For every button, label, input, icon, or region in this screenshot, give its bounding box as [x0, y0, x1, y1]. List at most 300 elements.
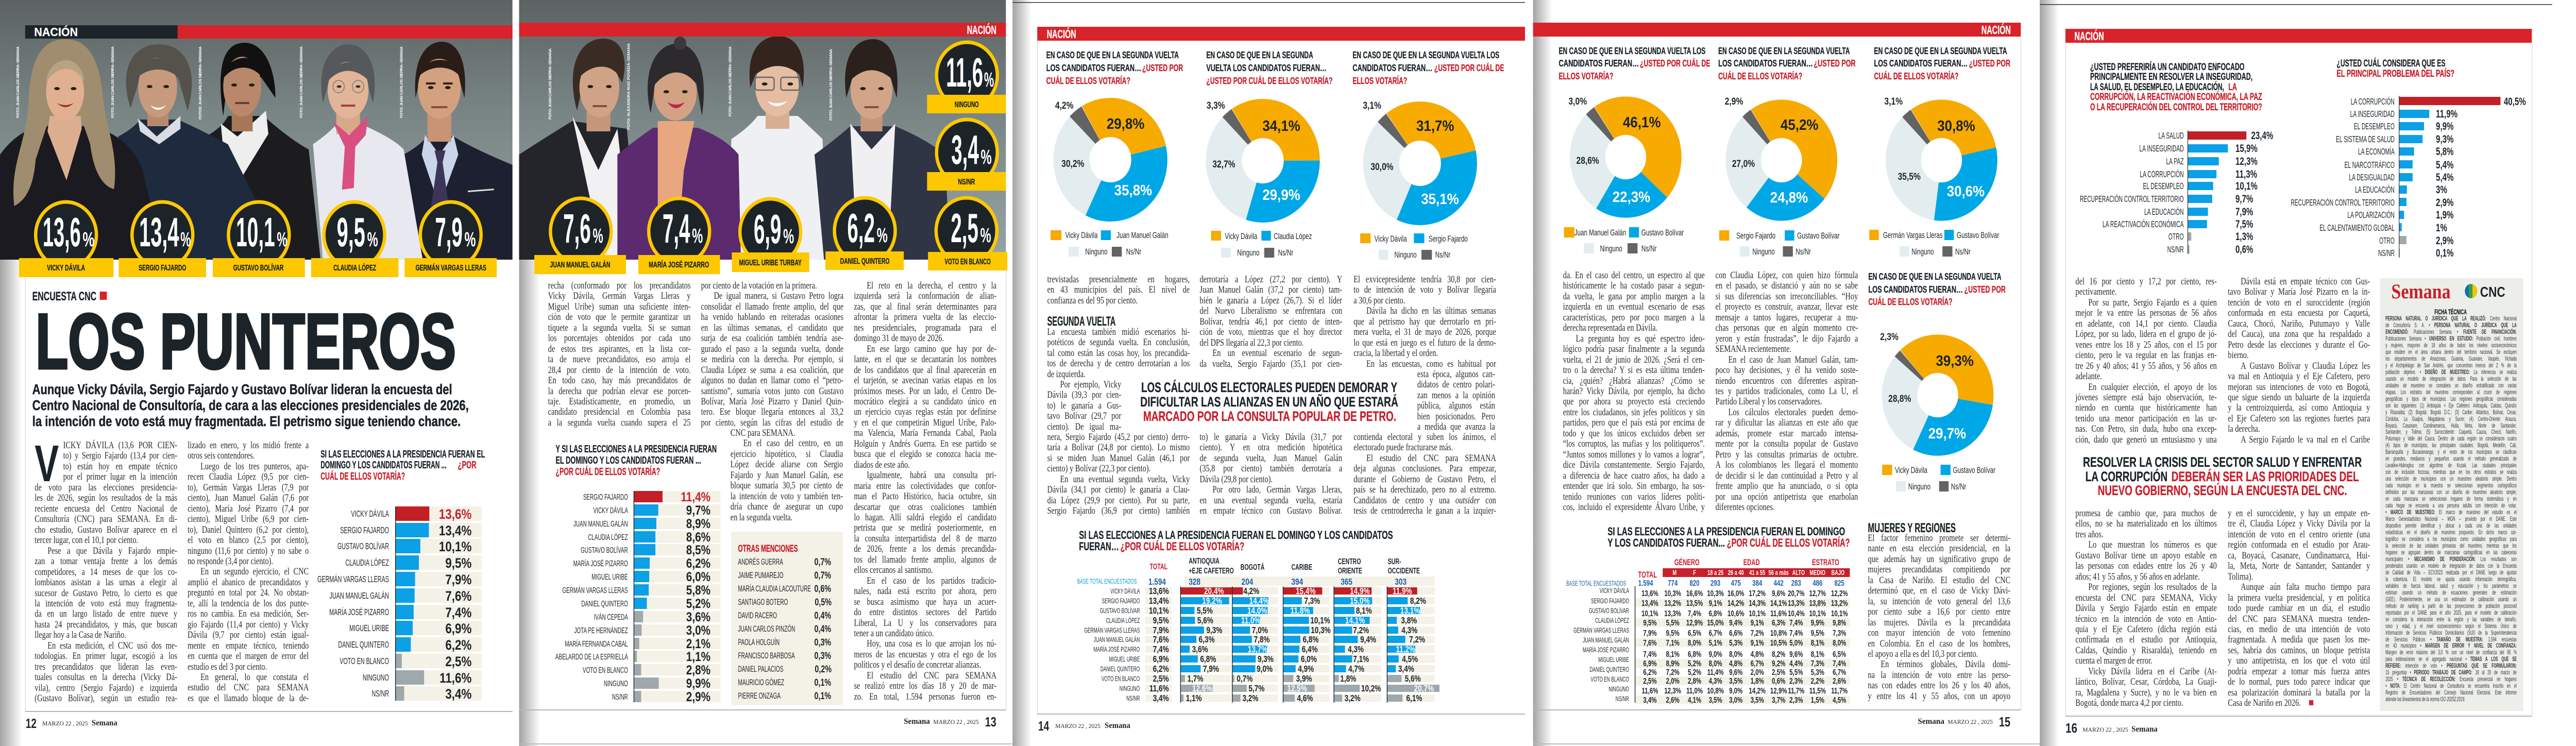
body text: page 12 column 1 top, beside drop cap: ICKY DÁVILA (13,6 POR CIEN-: [63, 440, 177, 451]
table column headers: +EJE CAFETERO: [1189, 566, 1234, 575]
table chart: by gender, age and stratum: 15,0%: [1707, 619, 1724, 628]
body text: page 15 column 2: mensaje a tantos lugares, recuperar a mu-: [1716, 312, 1858, 323]
table chart: by region: CLAUDIA LÓPEZ: [1106, 616, 1140, 625]
chart title: ¿USTED PREFERIRÍA UN CANDIDATO ENFOCADO: [2090, 61, 2245, 73]
table chart: by gender, age and stratum: 3,7%: [1772, 696, 1786, 705]
body text: page 12 column 1: cho estudio, Gustavo Bolívar aparece en el Pese a que Dávila y Fajardo empie-: [35, 524, 177, 556]
body text: page 14 column 3 upper: to de intención de voto y Bolívar llegaría Dávila ha dicho en las últimas semanas: [1353, 284, 1496, 316]
body text: page 13 column 1: la derecha que podrían elevar ese porcen-: [548, 386, 690, 397]
body text: page 16 column 2 lower: del CNC para SEMANA muestra tenden-: [2228, 614, 2370, 624]
table chart: by region: 14,4%: [1249, 596, 1269, 606]
section bar page 16: [2065, 29, 2532, 43]
donut panel: Galán vs Bolívar: CANDIDATOS FUERAN…: [1558, 58, 1639, 69]
body text: page 14 column 2 lower: [1199, 432, 1343, 516]
ficha técnica text: estadísticas en el diseño de muestreo propuesto. En dicho marco car-: [2385, 529, 2517, 536]
footer page 14: [1038, 718, 1130, 734]
body text: page 15 mujeres y regiones: y entre los 41 y 55 años, con un apoyo: [1868, 691, 2010, 702]
footer page 13: MARZO 22 , 2025: [933, 718, 979, 725]
badge: Juan Manuel Galán 7,6: %: [592, 225, 603, 247]
chart: preferred candidate focus: LA EDUCACIÓN: [2144, 207, 2184, 217]
body text: page 16 column 1 upper: tenido una menor participación en las ur-: [2075, 413, 2217, 424]
body text: page 13 column 2 top: se mediría con la derecha. Por ejemplo, si: [701, 354, 843, 365]
chart: preferred candidate focus: EL DESEMPLEO: [2143, 181, 2184, 192]
badge: Juan Manuel Galán 7,6: [534, 198, 626, 274]
body text: page 13 column 3: tos del llamado frente amplio, algunos de En el caso de los partidos tradicio-: [854, 554, 996, 586]
table title: ¿POR CUÁL DE ELLOS VOTARÍA?: [1121, 540, 1244, 553]
table chart: by gender, age and stratum: 4,5%: [1833, 696, 1846, 705]
pull quote page 16: DEBERÁN SER LAS PRIORIDADES DEL: [2172, 468, 2359, 484]
table chart: by gender, age and stratum: 11,6%: [1770, 609, 1787, 618]
ficha técnica text: • MARCO DE MUESTREO: El marco de muestreo del estudio es el: [2385, 508, 2517, 516]
body text: page 16 column 2 upper: Petro desde las elecciones y durante el Go- A Gustavo Bolívar y Claudia López les: [2228, 340, 2370, 371]
table chart: by gender, age and stratum: 7,4%: [1643, 650, 1657, 659]
body text: page 14 column 1 narrow beside pull quote: tavo Bolívar (29,7 por: [1047, 411, 1121, 421]
body text: page 13 column 2 top: ha venido hablando en reiteradas ocasiones: [701, 312, 843, 323]
chart: first round nine candidates: 9,5%: [445, 556, 472, 571]
table chart: by gender, age and stratum: 11,7%: [1831, 687, 1848, 696]
body text: page 14 column 3 upper: a 30,6 por ciento.: [1353, 295, 1405, 306]
donut panel: Dávila vs Galán: Juan Manuel Galán: [1116, 230, 1168, 241]
chart: first round nine candidates: 7,9%: [445, 572, 472, 587]
ficha técnica text: cada municipio en la muestra se seleccionan segmentos cartográficos: [2385, 482, 2517, 489]
body text: page 13 column 3: Holguín y Andrés Guerra. En ese partido se: [854, 438, 996, 449]
chart: first round extended list: VICKY DÁVILA: [594, 506, 629, 515]
body text: page 15 mujeres y regiones: nante en esta elección presidencial, en la: [1868, 543, 2010, 554]
body text: page 16 column 2 lower: fragmentada. A medida que pasen los me-: [2228, 634, 2370, 645]
body text: page 14 section segunda vuelta: tos de derecha y de centro derrotarían a los: [1047, 358, 1190, 369]
table headers: ESTRATO: [1812, 558, 1839, 568]
body text: page 15 mujeres y regiones: la Casa de Nariño. El estudio del CNC: [1868, 575, 2010, 586]
table chart: by gender, age and stratum: 14,1%: [1770, 599, 1787, 608]
donut panel: Galán vs Bolívar: 3,0%: [1569, 95, 1587, 107]
chart: main problem of the country: 1,9%: [2436, 209, 2454, 221]
body text: page 14 column 1 narrow beside pull quote: [1047, 379, 1121, 432]
footer page 12: [26, 716, 117, 731]
table headers: EDAD: [1743, 558, 1760, 568]
table title: SI LAS ELECCIONES A LA PRESIDENCIA FUERAN EL DOMINGO: [1607, 525, 1845, 538]
photo credits: FOTO: JUAN CARLOS SIERRA–SEMANA: [111, 46, 115, 118]
table chart: by region: 7,1%: [1353, 654, 1369, 664]
table chart: by gender, age and stratum: GUSTAVO BOLÍVAR: [1589, 606, 1629, 615]
body text: page 13 column 1: candidato presidencial en Colombia pasa: [548, 406, 690, 417]
table chart: by gender, age and stratum: 41 a 55: [1749, 568, 1765, 577]
table chart: by region: SERGIO FAJARDO: [1102, 597, 1140, 605]
table chart: by gender, age and stratum: 6,3%: [1772, 619, 1786, 628]
body text: page 13 column 2 bottom: En el caso del centro, en un: [743, 438, 843, 449]
table chart: by gender, age and stratum: 2,5%: [1643, 677, 1657, 686]
body text: page 14 column 1 narrow beside pull quote: Por ejemplo, Vicky: [1060, 379, 1121, 390]
ficha técnica text: una selección de municipios con un muestreo aleatorio simple. Dentro: [2385, 475, 2517, 482]
body text: page 13 column 2 top: santismo”, sumaría votos junto con Gustavo: [701, 386, 843, 397]
badge: Gustavo Bolívar 10,1: [213, 202, 305, 277]
chart: preferred candidate focus: 12,3%: [2235, 155, 2258, 167]
body text: page 14 column 1 lower: [1047, 432, 1190, 516]
body text: page 13 column 3: afrontar la primera vuelta de las eleccio-: [854, 312, 996, 323]
table chart: by gender, age and stratum: 6,2%: [1643, 668, 1657, 677]
pull quote page 14: LOS CÁLCULOS ELECTORALES PUEDEN DEMORAR Y: [1141, 379, 1397, 395]
ficha técnica text: (4) tipos de municipios, las principales ciudades: Bogotá, Medellín, Cali,: [2385, 442, 2517, 449]
box: otras menciones: FRANCISCO BARBOSA: [738, 651, 795, 661]
logo: Semana: Semana: [2391, 280, 2451, 303]
donut panel: Dávila vs Fajardo: Vicky Dávila: [1375, 234, 1407, 244]
chart: first round nine candidates: 7,6%: [445, 589, 472, 604]
ficha técnica text: Córdoba, La Guajira, Magdalena y Sucre; (4) Centro-Oriente: Arauca,: [2385, 415, 2517, 422]
table column headers: TOTAL: [1150, 562, 1168, 571]
badge: Daniel Quintero 6,2: 6,2: [848, 205, 875, 251]
body text: page 14 column 3 narrow beside pull quote: bien posicionados. Pero: [1417, 411, 1495, 422]
ficha técnica text: estiman usando un método de ecuaciones generales de estimación: [2385, 589, 2517, 596]
body text: page 14 column 1 lower: ciento) y Bolívar (22,3 por ciento).: [1047, 463, 1150, 474]
table chart: by gender, age and stratum: VOTO EN BLANCO: [1591, 675, 1629, 684]
body text: page 13 column 3: [854, 280, 996, 702]
chart: first round extended list: GUSTAVO BOLÍVAR: [581, 546, 628, 555]
ficha técnica text: los departamentos de Amazonas, Guainía, Guaviare, Vaupés, Vichada: [2385, 355, 2517, 362]
body text: page 13 column 1: ción de voto que le permite garantizar un: [548, 312, 690, 323]
badge: Gustavo Bolívar 10,1: GUSTAVO BOLÍVAR: [233, 263, 284, 273]
body text: page 12 column 1: da en un largo listado de entre nueve y: [35, 608, 177, 619]
body text: page 12 column 2: amplió el abanico de precandidatos y: [188, 577, 309, 588]
table chart: by region: MIGUEL URIBE: [1109, 655, 1140, 664]
table chart: by gender, age and stratum: 11,0%: [1686, 687, 1703, 696]
ficha técnica text: unidades de muestreo se considera un diseño estratificado con varias: [2385, 382, 2517, 389]
table chart: by region: 9,3%: [1206, 625, 1223, 635]
table chart: by region: VICKY DÁVILA: [1110, 587, 1140, 596]
table chart: by region: 3,4%: [1398, 664, 1414, 674]
table chart: by gender, age and stratum: 10,3%: [1707, 589, 1724, 598]
chart: preferred candidate focus: NS/NR: [2167, 244, 2184, 255]
chart: first round extended list: 5,8%: [686, 583, 710, 598]
table chart: by region: 14,0%: [1247, 606, 1267, 616]
donut panel: Galán vs Bolívar: Ns/Nr: [1641, 244, 1656, 254]
body text: page 13 column 2 bottom: dría chance de asegurar un cupo: [731, 501, 843, 512]
chart: first round extended list: 5,2%: [686, 597, 710, 611]
ficha técnica text: Santander, y Tolima; (5) Suroccidente: Caquetá, Cauca, Chocó, Nariño,: [2385, 428, 2517, 435]
table column headers: CENTRO: [1338, 556, 1361, 566]
table chart: by region: 14,1%: [1345, 616, 1365, 625]
chart: first round extended list: 9,7%: [686, 503, 710, 518]
body text: page 13 column 1: ta de nueve precandidatos, eso arroja el: [548, 354, 690, 365]
body text: page 13 column 1: tiquete a la segunda vuelta. Si se suman: [548, 323, 690, 333]
chart: first round nine candidates: 6,9%: [445, 621, 472, 636]
chart: first round extended list: 8,5%: [686, 543, 710, 557]
badge: Voto en blanco 2,5: [928, 198, 1007, 270]
badge: Ninguno 11,6: NINGUNO: [955, 100, 979, 109]
chart: preferred candidate focus: 11,3%: [2235, 168, 2257, 180]
table chart: by gender, age and stratum: 4,3%: [1709, 677, 1722, 686]
body text: page 16 column 2 upper: conformada en esta encuesta por Caquetá,: [2228, 308, 2370, 318]
body text: page 15 column 2: frente amplio que ha anunciado, o si opta: [1716, 481, 1858, 491]
table chart: by region: 10,2%: [1361, 684, 1381, 693]
table chart: by gender, age and stratum: 6,5%: [1833, 650, 1846, 659]
donut panel: Fajardo vs Bolívar: Gustavo Bolívar: [1797, 231, 1840, 241]
table title: FUERAN…: [1079, 540, 1119, 553]
badge: Sergio Fajardo 13,4: 13,4: [139, 209, 179, 255]
chart: first round extended list: 2,8%: [686, 663, 710, 677]
body text: page 16 column 2 upper: mejoran sus intenciones de voto en Bogotá,: [2228, 382, 2370, 393]
body text: page 16 column 2 lower: todo puede cambiar en un día, el estudio: [2228, 603, 2370, 614]
table chart: by gender, age and stratum: 13,3%: [1788, 599, 1805, 608]
table chart: by region: 14,9%: [1350, 586, 1370, 596]
donut panel: Vargas Lleras vs Bolívar: LOS CANDIDATOS FUERAN…: [1874, 58, 1968, 69]
table chart: by gender, age and stratum: 8,1%: [1666, 650, 1680, 659]
body text: page 16 column 1 upper: López, por su lado, lidera en el grupo de jó-: [2075, 329, 2217, 340]
body text: page 16 column 1 lower: confirmada en el estudio por Antioquia,: [2075, 634, 2217, 645]
logo: CNC: [2465, 284, 2505, 300]
chart title: LA: [2228, 82, 2237, 93]
photo credits: FOTO: JUAN CARLOS SIERRA–SEMANA: [15, 46, 20, 118]
table chart: by region: 13,6%: [1149, 586, 1169, 596]
donut panel: Dávila vs Fajardo: ¿USTED POR CUÁL DE: [1434, 62, 1504, 73]
badge: María José Pizarro 7,4: MARÍA JOSÉ PIZARRO: [649, 260, 709, 269]
table chart: by gender, age and stratum: 13,4%: [1641, 599, 1658, 608]
badge: María José Pizarro 7,4: [638, 198, 720, 274]
table chart: by gender, age and stratum: 4,4%: [1789, 659, 1803, 668]
chart title: ¿USTED CUÁL CONSIDERA QUE ES: [2336, 58, 2445, 69]
table chart: by gender, age and stratum: 9,6%: [1729, 668, 1743, 677]
body text: page 16 column 1 upper: ción, dado que generó un entusiasmo y una: [2075, 434, 2217, 445]
body text: page 15 mujeres y regiones: na la intención de voto entre las perso-: [1868, 670, 2010, 681]
donut panel: Dávila vs Bolívar: ¿USTED POR: [1964, 284, 2006, 295]
table chart: by region: 20,4%: [1204, 586, 1224, 596]
table chart: by gender, age and stratum: 6,7%: [1833, 668, 1846, 677]
table chart: by gender, age and stratum: 9,1%: [1709, 599, 1722, 608]
body text: page 14 column 3 narrow beside pull quote: [1417, 369, 1495, 432]
donut panel: Dávila vs Galán: ¿USTED POR: [1142, 63, 1183, 73]
body text: page 12 column 2: [188, 440, 309, 704]
chart: preferred candidate focus: 23,4%: [2251, 129, 2273, 141]
table column headers: [1150, 556, 1420, 575]
donut panel: Vargas Lleras vs Bolívar: 30,6%: [1947, 183, 1985, 200]
box: otras menciones: 0,1%: [814, 690, 831, 701]
donut panel: Dávila vs Bolívar: Ns/Nr: [1951, 482, 1966, 492]
section bar page 16: NACIÓN: [2075, 29, 2104, 43]
donut panel: Vargas Lleras vs Bolívar: Gustavo Bolívar: [1957, 230, 1999, 241]
chart: preferred candidate focus: OTRO: [2168, 231, 2184, 242]
donut panel: Vargas Lleras vs Bolívar: 30,8%: [1937, 118, 1975, 134]
donut panel: Vargas Lleras vs Bolívar: Germán Vargas Lleras: [1883, 230, 1943, 241]
body text: page 15 column 1: vuelta, el 21 de junio de 2026. ¿Será el cen-: [1563, 354, 1705, 365]
body text: page 15 column 1: izquierda en un eventual escenario de esas: [1563, 301, 1705, 312]
chart title: [556, 444, 717, 478]
badge: Vicky Dávila 13,6: [19, 202, 113, 277]
table chart: by gender, age and stratum: 3,4%: [1643, 696, 1657, 705]
table chart: by gender, age and stratum: 486: [1812, 579, 1822, 588]
body text: page 15 column 2: por una opción antipetrista que enarbolan: [1716, 491, 1858, 502]
table chart: by gender, age and stratum: 2,0%: [1666, 677, 1680, 686]
body text: page 16 column 1 lower: técnico en la intención de voto en Antio-: [2075, 614, 2217, 624]
body text: page 13 column 2 top: por ciento de la votación en la primera.: [701, 280, 817, 291]
body text: page 15 column 1: harán? Vicky Dávila, por ejemplo, ha dicho: [1563, 386, 1705, 397]
chart: preferred candidate focus: 0,6%: [2235, 243, 2253, 255]
chart: first round extended list: NS/NR: [612, 692, 628, 702]
chart: first round nine candidates: GERMÁN VARGAS LLERAS: [317, 574, 389, 585]
portrait: Germán Vargas Lleras: [404, 42, 513, 260]
table chart: by region: 3,8%: [1401, 616, 1417, 625]
donut panel: Vargas Lleras vs Bolívar: 3,1%: [1885, 95, 1903, 107]
body text: page 16 column 2 lower: esa polarización dominará la batalla por la: [2228, 687, 2370, 698]
chart: main problem of the country: LA CORRUPCIÓN: [2351, 96, 2395, 107]
body text: page 15 column 1: dice Dávila constantemente. Sergio Fajardo,: [1563, 460, 1705, 470]
donut panel: Dávila vs Fajardo: Ninguno: [1394, 250, 1417, 260]
badge: Claudia López 9,5: CLAUDIA LÓPEZ: [333, 263, 376, 273]
pull quote page 14: DIFICULTAR LAS ALIANZAS EN UN AÑO QUE ESTARÁ: [1140, 394, 1398, 410]
chart: main problem of the country: LA POLARIZACIÓN: [2347, 210, 2395, 221]
body text: page 13 column 2 top: surja de esa coalición también tendría ase-: [701, 333, 843, 344]
body text: page 16 column 2 upper: del Cauca), una zona que ha respaldado a: [2228, 329, 2370, 340]
body text: page 14 column 3 lower: durante el Gobierno de Gustavo Petro, el: [1353, 474, 1496, 485]
body text: page 14 column 2 lower: Dávila (29,8 por ciento).: [1200, 474, 1273, 485]
table chart: by region: 4,5%: [1402, 654, 1418, 664]
footer page 16: Semana: [2131, 725, 2158, 734]
chart: preferred candidate focus: 10,1%: [2235, 180, 2258, 192]
footer page 12: Semana: [92, 719, 117, 727]
body text: page 13 column 3: mocrático elegirá a su candidato único en: [854, 396, 996, 407]
photo background page 13: [519, 0, 1006, 258]
donut panel: Galán vs Bolívar: 46,1%: [1623, 114, 1661, 131]
footer page 14: Semana: [1105, 721, 1130, 730]
body text: page 15 column 2: diferentes opciones.: [1716, 502, 1775, 513]
ficha técnica text: tográfico se considera a los municipios como unidades geográficas para: [2385, 535, 2517, 542]
headline: Los punteros: LOS PUNTEROS: [36, 298, 456, 385]
section bar page 13: NACIÓN: [967, 23, 996, 37]
table title: [1607, 525, 1850, 549]
table chart: by gender, age and stratum: 5,3%: [1811, 668, 1824, 677]
table chart: by gender, age and stratum: 8,0%: [1688, 639, 1701, 648]
chart: first round nine candidates: NS/NR: [371, 689, 389, 699]
table chart: by gender, age and stratum: 9,2%: [1772, 659, 1786, 668]
donut panel: Dávila vs Fajardo: 3,1%: [1363, 99, 1381, 111]
chart: main problem of the country: LA INSEGURIDAD: [2350, 109, 2395, 120]
table chart: by region: 6,0%: [1301, 654, 1317, 664]
badge: Ninguno 11,6: %: [984, 69, 994, 91]
section bar page 12: [25, 25, 513, 39]
box: otras menciones: 0,2%: [815, 664, 832, 674]
body text: page 13 column 2 top: consolidar el llamado frente amplio, del que: [701, 301, 843, 312]
body text: page 14 column 1 opening: [1047, 274, 1190, 306]
chart: first round extended list: 11,4%: [681, 490, 710, 504]
table chart: by region: 19,2%: [1202, 596, 1222, 606]
ficha técnica text: Registro de Encuestadores del Consejo Nacional Electoral. Este informe: [2385, 689, 2517, 696]
table chart: by region: 12,6%: [1192, 684, 1212, 693]
body text: page 14 column 2 lower: de segunda vuelta, Juan Manuel Galán: [1200, 453, 1342, 464]
donut panel: Dávila vs Galán: [1046, 50, 1183, 257]
donut panel: Fajardo vs Bolívar: Ns/Nr: [1795, 247, 1811, 257]
box: otras menciones: 0,1%: [814, 677, 831, 688]
table chart: by region: GERMÁN VARGAS LLERAS: [1084, 626, 1140, 635]
portrait: Claudia López: [313, 44, 422, 260]
table chart: by gender, age and stratum: JUAN MANUEL GALÁN: [1583, 636, 1629, 645]
body text: page 13 column 2 top: Claudia López se suma a esa coalición, que: [701, 365, 843, 376]
body text: page 16 column 1 lower: encuesta del CNC para SEMANA, Vicky: [2075, 592, 2217, 603]
table chart: by gender, age and stratum: 13,3%: [1664, 609, 1681, 618]
body text: page 14 column 1 opening: trevistadas presencialmente en hogares,: [1047, 274, 1190, 285]
chart: preferred candidate focus: LA SALUD: [2158, 130, 2184, 141]
donut panel: Dávila vs Fajardo: Sergio Fajardo: [1429, 234, 1468, 244]
donut panel: Dávila vs López: 34,1%: [1262, 118, 1300, 134]
table chart: by region: JUAN MANUEL GALÁN: [1094, 635, 1140, 644]
body text: page 16 column 1 upper: niendo en cuenta que históricamente han: [2075, 402, 2217, 413]
badge: NS/NR 3,4: %: [981, 146, 992, 168]
chart: main problem of the country: EL NARCOTRÁFICO: [2345, 160, 2395, 171]
body text: page 13 column 2 top: Bolívar, María José Pizarro y Daniel Quin-: [701, 396, 843, 407]
donut panel: Dávila vs Bolívar: 39,3%: [1936, 353, 1974, 369]
chart: first round extended list: 6,0%: [686, 570, 710, 584]
table chart: by gender, age and stratum: 16,6%: [1686, 589, 1703, 598]
ficha técnica text: etapas. Los estratos del muestreo corresponden al cruce de regiones: [2385, 388, 2517, 396]
donut panel: Dávila vs Fajardo: ELLOS VOTARÍA?: [1352, 75, 1407, 86]
chart: preferred candidate focus: 7,9%: [2235, 206, 2253, 217]
body text: page 15 column 2: poco hay decisiones, y él ha venido soste-: [1716, 365, 1858, 376]
table title: ¿POR CUÁL DE ELLOS VOTARÍA?: [1727, 536, 1850, 549]
table chart: by gender, age and stratum: 442: [1774, 579, 1784, 588]
body text: page 14 column 3 lower: deja algunas conclusiones. Para empezar,: [1353, 463, 1496, 474]
table chart: by region: 7,2%: [1353, 625, 1369, 635]
body text: page 15 column 2: yeron y están frustradas”, le dijo Fajardo a En el caso de Juan Manuel Galán, tam-: [1716, 333, 1858, 365]
box: otras menciones: DANIEL PALACIOS: [738, 665, 784, 674]
badge: Germán Vargas Lleras 7,9: [404, 202, 497, 277]
body text: page 13 column 2 top: [701, 280, 844, 428]
ficha técnica text: para estimaciones en el agregado nacional • TEMAS A LOS QUE SE: [2385, 655, 2517, 663]
body text: page 16 column 1 lower: Dávila y Sergio Fajardo están en empate: [2075, 603, 2217, 614]
donut panel: Dávila vs López: 32,7%: [1212, 158, 1235, 169]
donut panel: Dávila vs Fajardo: EN CASO DE QUE EN LA SEGUNDA VUELTA LOS: [1352, 50, 1499, 60]
body text: page 15 mujeres y regiones: las mujeres. Dávila es la precandidata: [1868, 617, 2010, 628]
badge: Daniel Quintero 6,2: %: [877, 224, 888, 247]
ficha técnica text: dispositivo permite identificar y ubicar a cada una de las unidades: [2385, 522, 2517, 529]
body text: page 14 column 3 upper: [1353, 274, 1496, 369]
table chart: by gender, age and stratum: 7,6%: [1643, 639, 1657, 648]
box: otras menciones: 0,7%: [814, 556, 831, 567]
photo credits: FOTO: JUAN CARLOS SIERRA–SEMANA: [399, 46, 404, 118]
table chart: by gender, age and stratum: 10,1%: [1749, 609, 1766, 618]
chart: main problem of the country: 5,8%: [2436, 145, 2454, 157]
table chart: by region: 394: [1291, 577, 1303, 587]
body text: page 16 column 2 lower: [2228, 508, 2370, 708]
table chart: by gender, age and stratum: 10,1%: [1641, 609, 1658, 618]
table chart: by region: 4,2%: [1243, 586, 1260, 596]
body text: page 16 column 1 lower: Caldas, Quindío y Risaralda), teniendo en Vicky Dávila lidera en el Caribe (At-: [2075, 645, 2217, 677]
ficha técnica text: atiende los lineamientos de la norma ISO 20252:2019.: [2385, 696, 2465, 703]
sidebar: ficha técnica background and logos: FICHA TÉCNICA: [2434, 308, 2467, 316]
table title: Y LOS CANDIDATOS FUERAN...: [1607, 536, 1725, 549]
table chart: by gender, age and stratum: MARÍA JOSÉ PIZARRO: [1583, 646, 1629, 654]
body text: page 13 column 3: nales, nada está escrito por ahora, pero: [854, 586, 996, 597]
donut panel: Vargas Lleras vs Bolívar: CUÁL DE ELLOS VOTARÍA?: [1874, 71, 1959, 81]
donut panel: Galán vs Bolívar: 28,6%: [1577, 155, 1599, 166]
body text: page 16 column 1 lower: ra, Magdalena y Sucre), y no le va bien en: [2075, 687, 2217, 698]
photo credits: FOTO: JUAN CARLOS SIERRA–SEMANA: [728, 46, 732, 116]
chart title: SI LAS ELECCIONES A LA PRESIDENCIA FUERAN EL: [320, 449, 485, 460]
table chart: by gender, age and stratum: 774: [1668, 579, 1677, 588]
body text: page 13 column 1: 28,4 por ciento de la intención de voto.: [548, 365, 690, 376]
table chart: by gender, age and stratum: 2,8%: [1688, 677, 1701, 686]
ficha técnica text: 2025 • TÉCNICA DE RECOLECCIÓN: Encuesta presencial en hogares: [2385, 675, 2517, 683]
table chart: by region: 1,7%: [1188, 674, 1204, 684]
table chart: by gender, age and stratum: 5,0%: [1789, 639, 1803, 648]
chart: preferred candidate focus: 1,3%: [2235, 230, 2253, 242]
body text: page 14 column 1 lower: nera, Sergio Fajardo (45,2 por ciento) derro-: [1047, 432, 1190, 443]
table chart: by region: 15,4%: [1296, 586, 1316, 596]
footer page 12: MARZO 22 , 2025: [42, 720, 88, 727]
body text: page 14 column 1 narrow beside pull quote: ciento). De igual ma-: [1047, 421, 1121, 432]
body text: page 13 column 2 top: por ciento, según las cifras del estudio de: [701, 417, 843, 428]
pull quote page 16: LA CORRUPCIÓN: [2086, 468, 2167, 484]
donut panel: Dávila vs Fajardo: [1352, 50, 1504, 260]
body text: page 16 column 1 lower: lántico, Bolívar, Cesar, Córdoba, La Guaji-: [2075, 676, 2217, 687]
chart: first round extended list: 2,9%: [686, 690, 710, 704]
table chart: by gender, age and stratum: 8,1%: [1811, 639, 1824, 648]
body text: page 16 column 2 lower: y uno antipetrista, en los que el voto útil: [2228, 655, 2370, 666]
